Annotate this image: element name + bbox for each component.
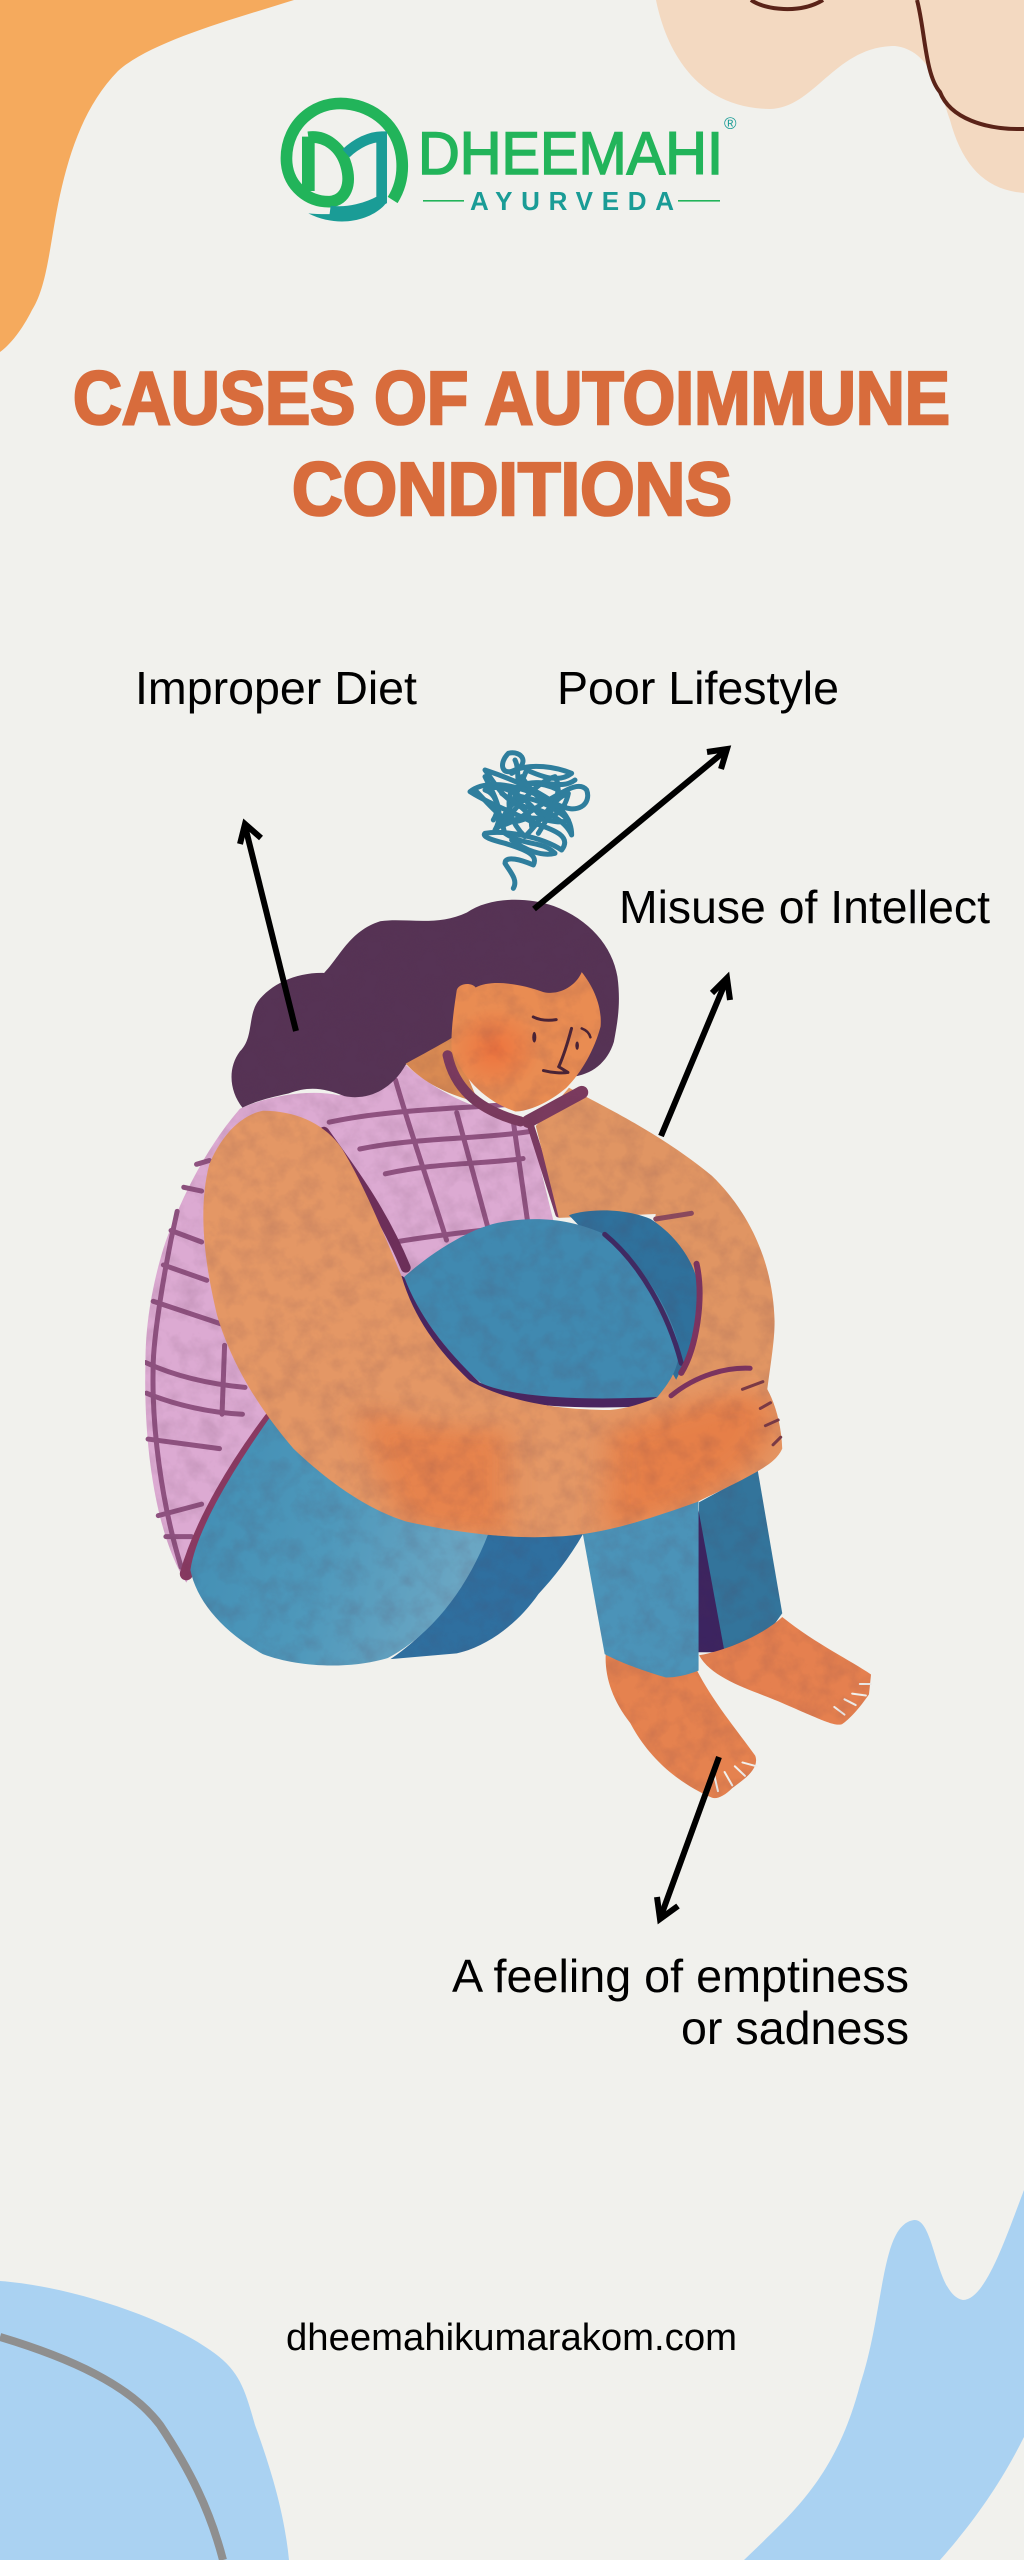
thigh [190,1413,488,1666]
fingers [742,1382,781,1445]
blush [449,1007,541,1092]
knee front [401,1213,700,1403]
background line: grey curve bottom left [0,2337,223,2560]
forearm shade [360,1393,772,1537]
hair [232,900,619,1108]
label: A feeling of emptiness or sadness: or sadness [681,2002,909,2054]
logo tagline rule left [423,200,464,202]
background shape: blue bottom-right blob [744,2190,1024,2560]
thigh shadow side [390,1532,583,1659]
logo mark [286,103,402,221]
logo: Dheemahi Ayurveda [286,103,737,221]
background shape: peach top-right blob [656,0,1024,193]
background line: brown curve top loop [751,0,823,9]
arrow: to Misuse of Intellect [661,978,730,1136]
eyebrow and eyes [533,1017,556,1020]
background shape: orange top-left blob [0,0,294,352]
label: Poor Lifestyle: Poor Lifestyle [557,662,839,714]
hand shadow [671,1368,750,1396]
back knee [569,1210,699,1380]
face [449,972,601,1111]
icon: scribble above head [470,753,588,888]
arrow: to Improper Diet [240,824,296,1031]
logo registered mark: ® [724,114,737,133]
shin shadow [697,1505,725,1652]
back shin [697,1470,782,1652]
back foot [699,1617,871,1725]
dress [145,1065,559,1583]
nose [559,1028,572,1067]
far arm [536,1088,775,1428]
mouth [543,1067,568,1073]
front shin [582,1497,699,1677]
near arm [203,1111,782,1537]
title [73,356,950,531]
label: Misuse of Intellect: Misuse of Intellect [619,881,990,933]
title: CAUSES OF AUTOIMMUNE [73,356,950,440]
label: A feeling of emptiness or sadness: A feeling of emptiness [452,1950,909,2002]
collar [448,1055,582,1121]
front foot [606,1654,757,1798]
background line: brown curve top right [917,0,1024,129]
logo tagline rule right [678,200,720,202]
illustration: seated woman hugging knees [145,900,871,1798]
arrow: to Poor Lifestyle [534,749,727,909]
background shape: blue bottom-left blob [0,2281,289,2560]
footer: website: dheemahikumarakom.com [286,2317,737,2359]
logo wordmark: DHEEMAHI [418,120,723,187]
logo tagline: AYURVEDA [470,186,674,216]
title: CONDITIONS [292,447,732,531]
arrow: to A feeling of emptiness [657,1757,719,1919]
label: Improper Diet: Improper Diet [135,662,417,714]
neck [406,1038,477,1099]
label: A feeling of emptiness or sadness [452,1950,909,2054]
